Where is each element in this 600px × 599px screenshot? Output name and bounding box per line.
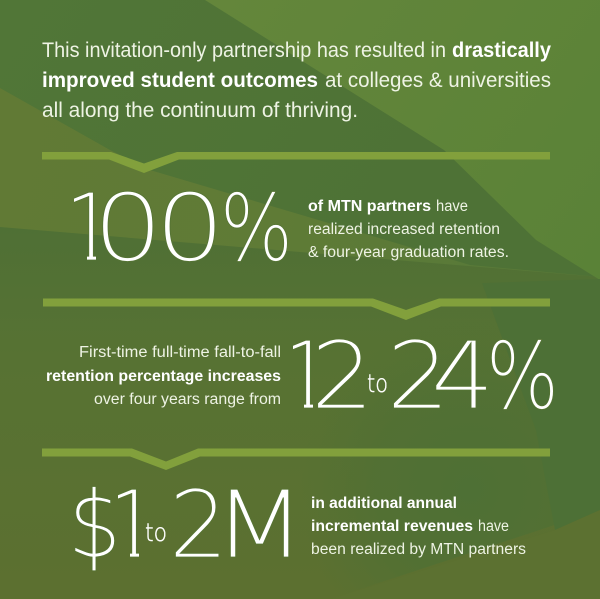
stat number 100%: 1 bbox=[60, 174, 119, 282]
stat number 12 to 24%: 24 bbox=[387, 322, 494, 430]
stat: 100% bbox=[74, 191, 508, 262]
divider 2 bbox=[43, 298, 550, 320]
stat number $1 to 2M: M bbox=[213, 471, 306, 579]
stat description: realized increased retention bbox=[308, 221, 500, 238]
heading paragraph bbox=[42, 39, 551, 122]
stat number 100% bbox=[74, 191, 288, 262]
heading paragraph: drastically bbox=[452, 39, 551, 62]
stat number $1 to 2M: 2 bbox=[169, 471, 228, 579]
stat description: & four-year graduation rates. bbox=[308, 244, 509, 261]
divider 1 bbox=[42, 152, 550, 173]
stat description: of MTN partners bbox=[308, 198, 431, 215]
stat description bbox=[311, 495, 526, 558]
stat: 12 to 24% bbox=[47, 339, 554, 410]
stat description: been realized by MTN partners bbox=[311, 541, 526, 558]
stat number $1 to 2M: 1 bbox=[103, 471, 162, 579]
stat number 12 to 24% bbox=[293, 339, 554, 410]
stat number 12 to 24%: % bbox=[486, 323, 559, 431]
stat number 12 to 24%: 2 bbox=[311, 322, 374, 430]
stat number $1 to 2M: $ bbox=[68, 471, 121, 579]
divider 3 bbox=[42, 448, 550, 470]
heading paragraph: improved student outcomes bbox=[42, 69, 318, 92]
stat number $1 to 2M: to bbox=[145, 518, 167, 547]
stat: $1 to 2M bbox=[75, 486, 526, 570]
heading paragraph: all along the continuum of thriving. bbox=[42, 99, 358, 122]
stat number $1 to 2M bbox=[75, 486, 288, 570]
stat description: over four years range from bbox=[94, 391, 281, 408]
stat description: in additional annual bbox=[311, 495, 457, 512]
stat description: have bbox=[478, 518, 509, 535]
stat description: First-time full-time fall-to-fall bbox=[79, 344, 281, 361]
stat number 12 to 24%: 1 bbox=[277, 322, 336, 430]
stat description bbox=[308, 198, 509, 261]
stat number 12 to 24%: to bbox=[367, 369, 388, 398]
heading paragraph: This invitation-only partnership has resulted in bbox=[42, 39, 446, 62]
stat description bbox=[46, 344, 281, 408]
stat description: have bbox=[436, 198, 468, 215]
heading paragraph: at colleges & universities bbox=[325, 69, 551, 92]
stat number 100%: 00 bbox=[93, 174, 225, 283]
stat number 100%: % bbox=[220, 175, 293, 283]
stat description: incremental revenues bbox=[311, 518, 473, 535]
stat description: retention percentage increases bbox=[46, 368, 281, 385]
